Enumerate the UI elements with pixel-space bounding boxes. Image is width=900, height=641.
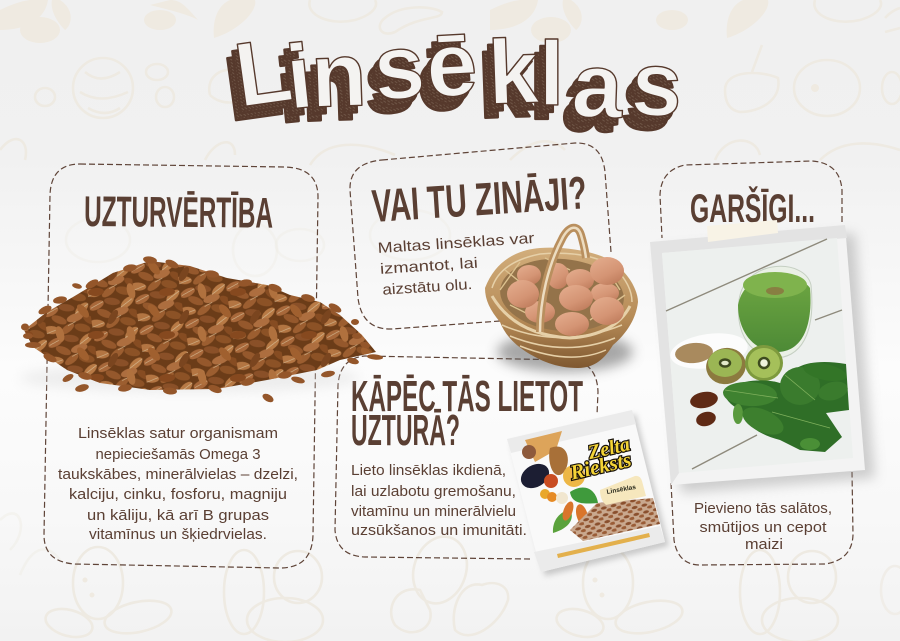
text block: serving ideas: Pievieno tās salātos, [694, 500, 832, 517]
product label [600, 476, 646, 505]
heading: KĀPĒC TĀS LIETOT UZTURĀ? [351, 372, 583, 455]
heading: KĀPĒC TĀS LIETOT UZTURĀ?: UZTURĀ? [351, 406, 460, 455]
title: Linsēklas [224, 20, 680, 145]
dates [689, 390, 719, 428]
panel: did you know [350, 143, 611, 329]
text block: eggs tip: izmantot, lai [380, 255, 478, 278]
brand logo [564, 433, 636, 485]
flax window [570, 498, 660, 541]
text block: nutrition description: nepieciešamās Omega 3 [96, 446, 260, 463]
text block: nutrition description: un kāliju, kā arī B grupas [87, 507, 269, 524]
text block: benefits: uzsūkšanos un imunitāti. [351, 522, 527, 539]
bowl of ground flax [668, 329, 750, 373]
text block: benefits: lai uzlabotu gremošanu, [351, 483, 516, 500]
spinach leaves [722, 360, 850, 452]
text block: benefits [351, 462, 527, 539]
image: egg basket [485, 228, 638, 372]
text block: eggs tip: aizstātu olu. [382, 276, 473, 299]
image: product bag [507, 410, 669, 576]
wicker strands [492, 253, 632, 357]
text block: benefits: Lieto linsēklas ikdienā, [351, 462, 506, 479]
title: Linsēklas [219, 27, 675, 152]
heading: VAI TU ZINĀJI?: VAI TU ZINĀJI? [370, 166, 588, 232]
brand logo: Rieksts [567, 447, 634, 485]
eggs [507, 257, 624, 336]
kiwi halves [702, 343, 783, 389]
image: smoothie photo [650, 220, 875, 493]
text block: nutrition description: Linsēklas satur organismam [78, 425, 278, 442]
panel: tasty [660, 161, 853, 565]
text block: nutrition description: taukskābes, minerālvielas – dzelzi, [58, 466, 298, 483]
brand logo: Zelta [585, 433, 632, 464]
text block: nutrition description: kalciju, cinku, fosforu, magniju [69, 486, 287, 503]
heading: UZTURVĒRTĪBA: UZTURVĒRTĪBA [84, 188, 273, 238]
bag illustrations [517, 431, 598, 533]
heading: KĀPĒC TĀS LIETOT UZTURĀ?: KĀPĒC TĀS LIETOT [351, 372, 583, 421]
text block: nutrition description: vitamīnus un šķiedrvielas. [89, 526, 267, 543]
heading: GARŠĪGI...: GARŠĪGI... [690, 185, 815, 231]
tape [707, 220, 778, 242]
text block: nutrition description [58, 425, 298, 543]
title: Linsēklas [229, 13, 685, 138]
image: flax seed pile [20, 255, 383, 404]
text block: serving ideas: smūtijos un cepot [700, 519, 827, 536]
basket body [485, 248, 638, 368]
edge and stray seeds [21, 255, 383, 404]
text block: serving ideas [694, 500, 832, 553]
text block: benefits: vitamīnu un minerālvielu [351, 503, 516, 520]
panel: nutritional value [44, 164, 318, 568]
text block: serving ideas: maizi [745, 536, 783, 553]
text block: eggs tip: Maltas linsēklas var [377, 230, 535, 257]
panel: why use [335, 356, 598, 559]
product label: Linsēklas [606, 484, 637, 496]
handle [540, 228, 586, 332]
smoothie glass [738, 266, 812, 358]
text block: eggs tip [377, 230, 538, 299]
